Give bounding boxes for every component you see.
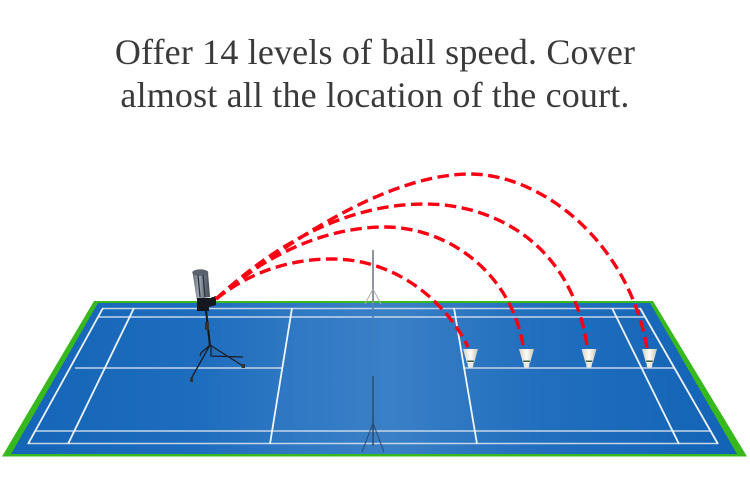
title bbox=[115, 32, 635, 115]
title: Offer 14 levels of ball speed. Cover bbox=[115, 32, 635, 72]
title: almost all the location of the court. bbox=[120, 75, 630, 115]
net post far bbox=[365, 250, 381, 345]
ball machine bbox=[190, 269, 245, 382]
shuttlecocks bbox=[463, 349, 657, 368]
court surface bbox=[2, 301, 747, 456]
trajectories bbox=[216, 174, 647, 348]
court lines bbox=[28, 308, 718, 444]
net post near bbox=[362, 376, 384, 452]
